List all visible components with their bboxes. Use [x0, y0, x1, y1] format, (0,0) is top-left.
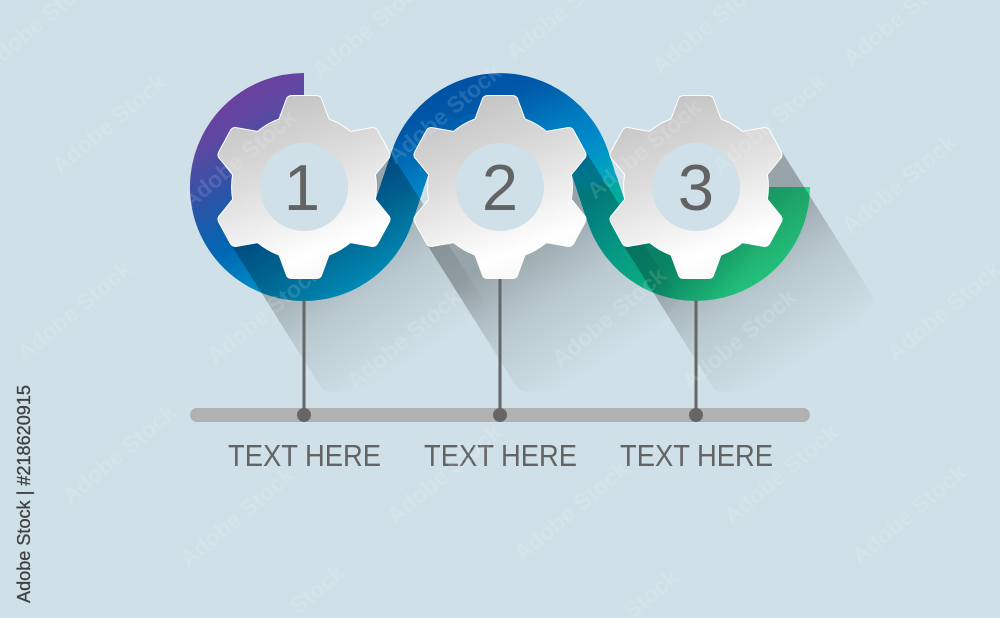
stock watermarks: Adobe Stock [547, 262, 671, 372]
stock watermarks: Adobe Stock [175, 462, 299, 572]
stock watermarks: Adobe Stock [509, 456, 633, 566]
stock watermarks: Adobe Stock [47, 69, 171, 179]
stock watermarks: Adobe Stock [677, 284, 801, 394]
connector 2 [493, 277, 507, 422]
stock watermarks: Adobe Stock [202, 259, 326, 369]
label 3: TEXT HERE [620, 438, 773, 473]
label 1: TEXT HERE [228, 438, 381, 473]
stock watermarks: Adobe Stock [382, 419, 506, 529]
gear 1 with number [218, 96, 390, 278]
stock watermarks: Adobe Stock [12, 256, 136, 366]
label 2: TEXT HERE [424, 438, 577, 473]
long shadow: gear 2 [426, 151, 678, 392]
stock watermarks: Adobe Stock [837, 129, 961, 239]
gear 2 with number: 2 [482, 151, 518, 224]
stock watermarks: Adobe Stock [707, 69, 831, 179]
stock watermarks: Adobe Stock [582, 94, 706, 204]
long shadow: gear 3 [622, 151, 874, 392]
ribbon: wave through three gears [211, 94, 789, 280]
gear 2 with number [414, 96, 586, 278]
stock watermarks: Adobe Stock [382, 59, 506, 169]
stock watermarks: Adobe Stock [177, 104, 301, 214]
gear 1 with number: 1 [284, 151, 320, 224]
gear 3 with number: 3 [678, 151, 714, 224]
connector 3 [689, 300, 703, 422]
gear 3 with number [610, 96, 782, 278]
stock watermarks: Adobe Stock [342, 284, 466, 394]
stock watermarks: Adobe Stock [57, 399, 181, 509]
connector 1 [297, 300, 311, 422]
long shadow: gear 1 [230, 151, 482, 392]
stock id side text: Adobe Stock | #218620915 [14, 385, 34, 603]
stock watermarks: Adobe Stock [719, 419, 843, 529]
ribbon segment 2: blue arc [401, 94, 598, 190]
ribbon segment 3: teal to green [597, 184, 789, 280]
stock watermarks: Stock [285, 559, 349, 618]
stock watermarks: Adobe Stock [847, 459, 971, 569]
ribbon segment 1: purple to blue [211, 94, 402, 280]
timeline bar [190, 408, 810, 422]
